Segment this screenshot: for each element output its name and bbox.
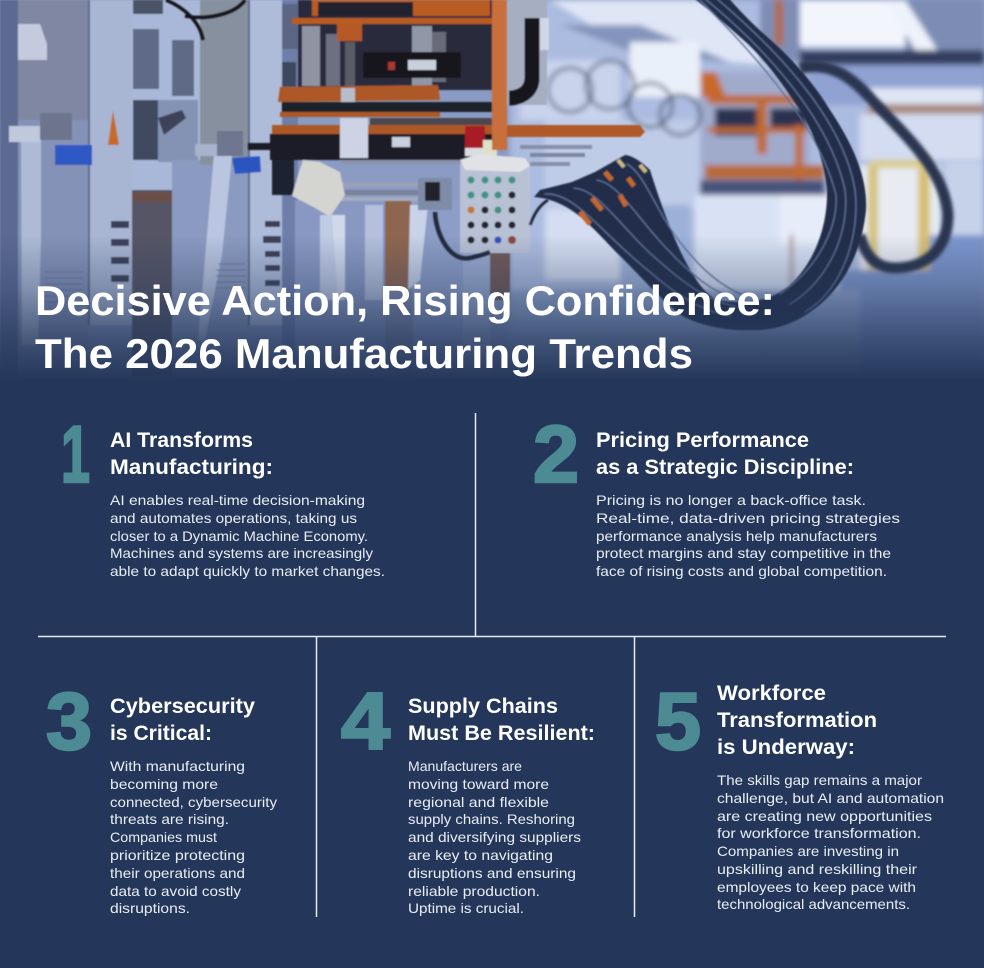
title: Decisive Action, Rising Confidence: (35, 277, 775, 324)
body text 2: protect margins and stay competitive in the (596, 545, 891, 561)
heading 3: Cybersecurity (110, 695, 255, 718)
heading 5: Workforce (717, 682, 826, 705)
control box cable (435, 212, 490, 258)
body text 3: threats are rising. (110, 811, 229, 827)
body text 2 (596, 492, 900, 579)
body text 5 (717, 772, 944, 912)
heading 2: Pricing Performance (596, 429, 809, 452)
heading 2 (596, 429, 854, 479)
body text 4 (408, 758, 581, 916)
brackets (9, 126, 41, 142)
dark top cable behind (166, 0, 245, 40)
body text 4: disruptions and ensuring (408, 865, 576, 881)
body text 4: Manufacturers are (408, 758, 522, 774)
body text 3: data to avoid costly (110, 883, 241, 899)
body text 4: reliable production. (408, 883, 540, 899)
body text 3: Companies must (110, 829, 217, 845)
heading 2: as a Strategic Discipline: (596, 456, 854, 479)
body text 2: Real-time, data-driven pricing strategies (596, 510, 900, 526)
left cabinets (0, 0, 510, 380)
body text 4: supply chains. Reshoring (408, 811, 575, 827)
trend 3: cybersecurity (46, 677, 277, 916)
body text 1: AI enables real-time decision-making (110, 492, 365, 508)
body text 5: for workforce transformation. (717, 825, 921, 841)
body text 5: employees to keep pace with (717, 879, 916, 895)
body text 4: are key to navigating (408, 847, 553, 863)
photo: factory machinery (0, 0, 984, 394)
heading 5 (717, 682, 877, 759)
warning triangle (108, 110, 119, 145)
robot head: orange press assembly (166, 0, 645, 258)
body text 5: Companies are investing in (717, 843, 899, 859)
red beacon (465, 126, 485, 148)
body text 2: face of rising costs and global competition. (596, 563, 887, 579)
heading 5: Transformation (717, 709, 877, 732)
vertical orange beam (492, 0, 507, 150)
cloth rag (292, 160, 345, 217)
body text 4: moving toward more (408, 776, 549, 792)
heading 5: is Underway: (717, 736, 855, 759)
title: The 2026 Manufacturing Trends (35, 330, 693, 377)
heading 4: Supply Chains (408, 695, 558, 718)
title (35, 277, 775, 377)
trend 5: workforce transformation (655, 677, 944, 912)
bottom fade to navy (0, 235, 984, 381)
main cable bundle (534, 0, 866, 330)
trend 2: pricing performance (533, 410, 900, 579)
heading 1: Manufacturing: (110, 456, 273, 479)
body text 1 (110, 492, 385, 579)
body text 3 (110, 758, 277, 916)
control box (460, 163, 530, 253)
body text 3: With manufacturing (110, 758, 245, 774)
keypad box (418, 178, 452, 210)
body text 5: upskilling and reskilling their (717, 861, 917, 877)
body text 1: Machines and systems are increasingly (110, 545, 373, 561)
number 1: 1 (61, 410, 90, 500)
body text 3: connected, cybersecurity (110, 794, 277, 810)
body text 1: able to adapt quickly to market changes. (110, 563, 385, 579)
background: blurred factory hall (510, 0, 984, 380)
body text 4: and diversifying suppliers (408, 829, 581, 845)
heading 1 (110, 429, 273, 479)
pipes (340, 182, 420, 187)
body text 4: regional and flexible (408, 794, 549, 810)
body text 5: technological advancements. (717, 896, 910, 912)
body text 3: their operations and (110, 865, 245, 881)
white tape strips (21, 142, 41, 345)
heading 3: is Critical: (110, 722, 212, 745)
number 2: 2 (533, 410, 579, 500)
body text 5: challenge, but AI and automation (717, 790, 944, 806)
body text 3: disruptions. (110, 900, 190, 916)
body text 2: Pricing is no longer a back-office task. (596, 492, 866, 508)
number 4: 4 (341, 677, 390, 767)
vents (45, 264, 246, 302)
number 5: 5 (655, 677, 701, 767)
heading 3 (110, 695, 255, 745)
body text 4: Uptime is crucial. (408, 900, 524, 916)
body text 1: closer to a Dynamic Machine Economy. (110, 528, 368, 544)
body text 2: performance analysis help manufacturers (596, 528, 877, 544)
trend 4: supply chains (341, 677, 595, 916)
body text 5: are creating new opportunities (717, 808, 932, 824)
body text 3: prioritize protecting (110, 847, 245, 863)
body text 3: becoming more (110, 776, 218, 792)
divider lines (38, 413, 946, 917)
body text 1: and automates operations, taking us (110, 510, 357, 526)
heading 1: AI Transforms (110, 429, 253, 452)
blue blocks (55, 145, 92, 165)
body text 5: The skills gap remains a major (717, 772, 922, 788)
trend 1: AI transforms manufacturing (61, 410, 385, 579)
heading 4 (408, 695, 595, 745)
far-right second cable (800, 67, 948, 268)
indicator lights (111, 221, 281, 286)
number 3: 3 (46, 677, 92, 767)
heading 4: Must Be Resilient: (408, 722, 595, 745)
